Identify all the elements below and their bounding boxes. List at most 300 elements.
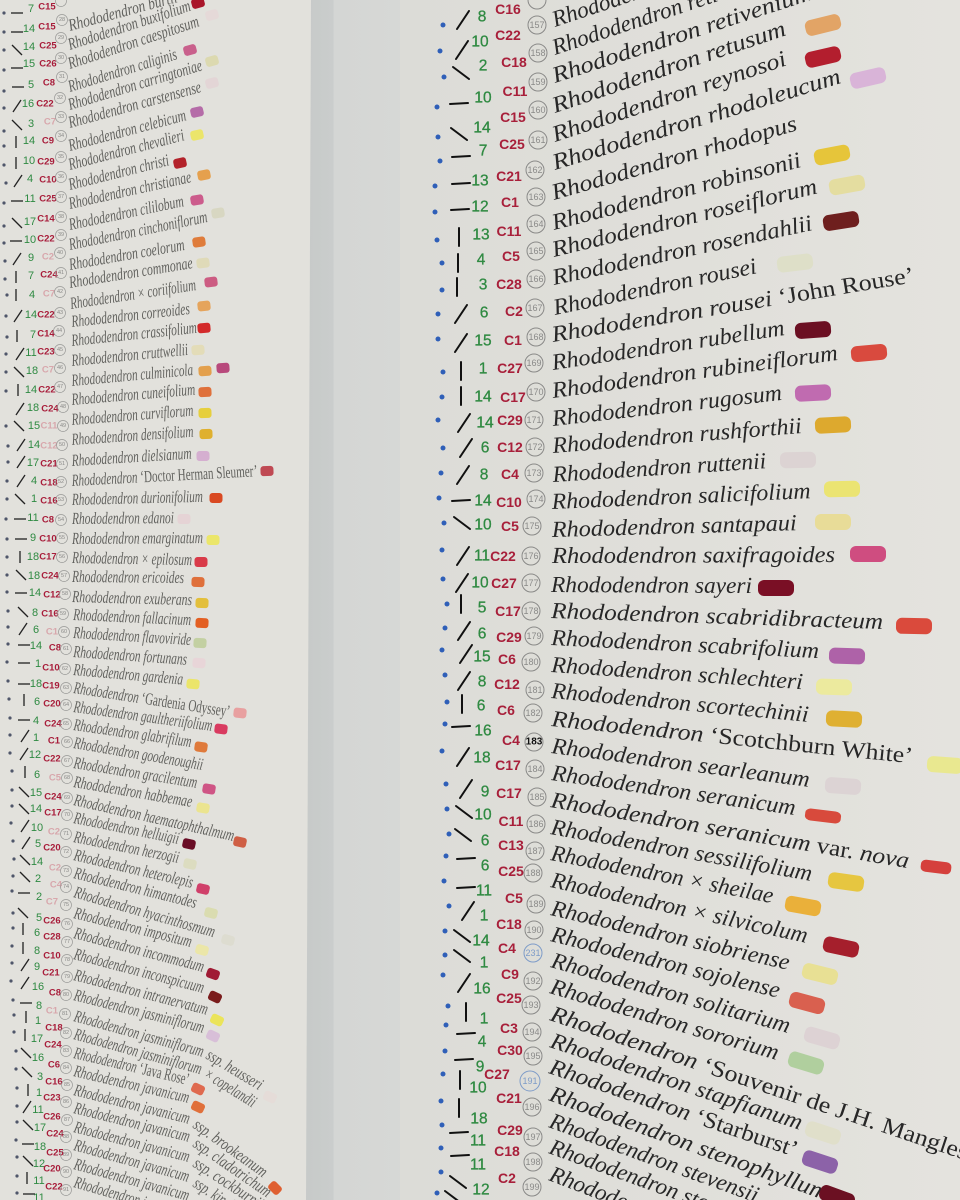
handwritten index columns, left sheet: C22 xyxy=(37,234,55,244)
handwritten index columns, left sheet: 89 xyxy=(63,1152,69,1158)
handwritten index columns, left sheet: 49 xyxy=(60,423,66,429)
row 168: Rhododendron rousei 'John Rouse': 168 xyxy=(528,332,544,342)
handwritten index columns, left sheet: 9 xyxy=(34,961,40,973)
name and swatch: commonae: Rhododendron commonae xyxy=(67,253,194,292)
row 187: Rhododendron × sheilae: C13 xyxy=(498,837,524,853)
row 200: 12 xyxy=(472,1182,490,1198)
handwritten index columns, left sheet: C24 xyxy=(41,570,59,582)
name and swatch: himantodes: Rhododendron himantodes xyxy=(71,863,199,912)
handwritten index columns, left sheet: 17 xyxy=(34,1122,46,1134)
name and swatch: dielsianum xyxy=(70,444,210,470)
handwritten index columns, left sheet: 28 xyxy=(59,17,65,23)
name: jasminiflorum × copelandii: × copelandii xyxy=(201,1064,260,1111)
handwritten index columns, left sheet: 38 xyxy=(58,214,64,220)
row 182: Rhododendron 'Scotchburn White': C6 xyxy=(497,702,515,718)
name and swatch: herzogii: Rhododendron herzogii xyxy=(72,827,181,867)
row 189: Rhododendron siobriense: 189 xyxy=(528,899,544,909)
row 156 xyxy=(440,0,546,29)
handwritten index columns, left sheet: 12 xyxy=(29,749,41,761)
row 169: Rhododendron rubellum: 169 xyxy=(526,358,542,368)
name and swatch: impositum xyxy=(71,903,210,957)
row 160: Rhododendron retusum: Rhododendron retusum xyxy=(548,16,789,118)
row 195: Rhododendron 'Starburst': 4 xyxy=(478,1034,487,1050)
row 180: Rhododendron schlechteri: C6 xyxy=(498,651,516,667)
name and swatch: correoides xyxy=(70,299,211,331)
name and swatch: correoides: Rhododendron correoides xyxy=(70,299,191,331)
row 166: Rhododendron rosendahlii: 3 xyxy=(479,276,487,294)
row 161: Rhododendron reynosoi: Rhododendron reynosoi xyxy=(548,46,789,147)
name and swatch: gardenia xyxy=(72,660,200,690)
row 166: Rhododendron rosendahlii: Rhododendron rosendahlii xyxy=(549,210,814,290)
name and swatch: helluigii: Rhododendron helluigii xyxy=(72,808,181,848)
row 185: Rhododendron seranicum var. nova: C17 xyxy=(496,785,522,801)
row 174: Rhododendron salicifolium xyxy=(436,478,860,514)
handwritten index columns, left sheet: 14 xyxy=(30,640,42,652)
name: javanicum ssp. cladotrichum: Rhododendron javanicum xyxy=(71,1098,192,1146)
name and swatch: cruttwellii: Rhododendron cruttwellii xyxy=(70,340,189,370)
row 179: Rhododendron scabrifolium: 6 xyxy=(478,626,486,642)
name and swatch: dielsianum: Rhododendron dielsianum xyxy=(70,444,192,470)
handwritten index columns, left sheet: C22 xyxy=(45,1182,63,1192)
handwritten index columns, left sheet: C26 xyxy=(43,916,61,926)
row 163: Rhododendron rhodopus xyxy=(432,111,800,216)
row 177: Rhododendron sayeri: 177 xyxy=(523,578,539,588)
handwritten index columns, left sheet: C29 xyxy=(37,156,55,168)
handwritten index columns, left sheet: 15 xyxy=(28,420,40,432)
handwritten index columns, left sheet: 8 xyxy=(36,1000,42,1012)
handwritten index columns, left sheet: 2 xyxy=(36,891,42,903)
handwritten index columns, left sheet: 83 xyxy=(63,1048,69,1054)
row 167: Rhododendron rousei: C2 xyxy=(505,303,523,319)
name and swatch: crassifolium: Rhododendron crassifolium xyxy=(70,318,198,350)
row 165: Rhododendron roseiflorum: 4 xyxy=(477,252,486,268)
row 172: Rhododendron rushforthii: Rhododendron rushforthii xyxy=(550,413,803,458)
name and swatch: intranervatum: Rhododendron intranervatum xyxy=(71,965,210,1019)
name and swatch: helluigii xyxy=(72,808,196,850)
row 174: Rhododendron salicifolium: 174 xyxy=(528,494,544,504)
row 193: Rhododendron 'Souvenir de J.H. Mangles': 193 xyxy=(523,1000,539,1010)
row 184: Rhododendron seranicum: C17 xyxy=(495,757,521,773)
row 195: Rhododendron 'Starburst' xyxy=(444,1022,840,1175)
handwritten index columns, left sheet: C12 xyxy=(43,590,61,600)
handwritten index columns, left sheet: 75 xyxy=(63,902,69,908)
row 164: Rhododendron robinsonii: Rhododendron robinsonii xyxy=(548,147,803,235)
handwritten index columns, left sheet: 16 xyxy=(22,98,34,110)
handwritten index columns, left sheet: C20 xyxy=(43,842,61,854)
name and swatch: intranervatum xyxy=(71,965,225,1027)
row 178: Rhododendron scabridibracteum: 5 xyxy=(478,600,486,616)
row 180: Rhododendron schlechteri xyxy=(440,645,852,696)
name and swatch: cuneifolium xyxy=(70,380,212,409)
row 181: Rhododendron scortechinii: Rhododendron scortechinii xyxy=(550,678,810,727)
row 195: Rhododendron 'Starburst': C30 xyxy=(497,1042,523,1058)
handwritten index columns, left sheet: 1 xyxy=(36,1087,42,1099)
row 184: Rhododendron seranicum: Rhododendron seranicum xyxy=(549,760,797,820)
row 164: Rhododendron robinsonii xyxy=(434,144,851,246)
name and swatch: habbemae: Rhododendron habbemae xyxy=(72,772,194,811)
name and swatch: crassifolium xyxy=(70,318,211,350)
row 175: Rhododendron santapaui xyxy=(442,510,851,542)
name: goodenoughii: Rhododendron goodenoughii xyxy=(72,733,205,774)
row 179: Rhododendron scabrifolium: C29 xyxy=(496,629,522,645)
handwritten index columns, left sheet: C21 xyxy=(42,968,60,978)
row 193: Rhododendron 'Souvenir de J.H. Mangles': 16 xyxy=(473,980,491,998)
row 176: Rhododendron saxifragoides: 176 xyxy=(523,551,539,561)
row 190: Rhododendron sojolense xyxy=(446,902,826,1015)
row 187: Rhododendron × sheilae: Rhododendron × sheilae xyxy=(548,840,776,908)
handwritten index columns, left sheet: C24 xyxy=(46,1128,64,1140)
row 160: Rhododendron retusum xyxy=(436,13,842,140)
row 195: Rhododendron 'Starburst': Rhododendron ‘Starburst’ xyxy=(545,1054,802,1162)
row 169: Rhododendron rubellum: 1 xyxy=(479,360,487,378)
row 189: Rhododendron siobriense xyxy=(442,878,839,986)
row 182: Rhododendron 'Scotchburn White': 182 xyxy=(525,708,541,718)
handwritten index columns, left sheet: C7 xyxy=(42,364,54,376)
row 172: Rhododendron rushforthii: 6 xyxy=(481,440,489,456)
handwritten index columns, left sheet: 43 xyxy=(57,310,63,316)
handwritten index columns, left sheet: 69 xyxy=(64,795,70,801)
handwritten index columns, left sheet: 73 xyxy=(63,868,69,874)
handwritten index columns, left sheet: 41 xyxy=(58,270,64,276)
row 171: Rhododendron rugosum: 171 xyxy=(526,415,542,425)
name and swatch: durionifolium: Rhododendron durionifolium xyxy=(71,487,203,509)
row 165: Rhododendron roseiflorum: 165 xyxy=(528,246,544,256)
row 231: Rhododendron solitarium: Rhododendron solitarium xyxy=(548,947,793,1038)
name and swatch: emarginatum: Rhododendron emarginatum xyxy=(71,528,203,548)
row 175: Rhododendron santapaui: 175 xyxy=(524,521,540,531)
name and swatch: cililobum xyxy=(66,191,204,234)
handwritten index columns, left sheet: 6 xyxy=(34,927,40,939)
handwritten index columns, left sheet: C23 xyxy=(43,1092,61,1104)
row 187: Rhododendron × sheilae: 187 xyxy=(527,846,543,856)
row 160: Rhododendron retusum: C15 xyxy=(500,109,526,125)
row 163: Rhododendron rhodopus: 12 xyxy=(471,198,489,216)
row 158: Rhododendron reticulatum: 158 xyxy=(530,48,546,58)
name and swatch: fortunans xyxy=(72,642,206,669)
handwritten index columns, left sheet: 50 xyxy=(59,442,65,448)
row 198: Rhododendron suaveolens: C18 xyxy=(494,1143,520,1159)
handwritten index columns, left sheet: C8 xyxy=(49,988,61,998)
name and swatch: coelorum: Rhododendron coelorum xyxy=(67,235,186,274)
row 191: Rhododendron stenophyllum: Rhododendron stenophyllum xyxy=(545,1081,832,1200)
row 163: Rhododendron rhodopus: 163 xyxy=(528,192,544,202)
name and swatch: gracilentum xyxy=(72,753,216,795)
name and swatch: densifolium xyxy=(70,422,213,449)
handwritten index columns, left sheet: 14 xyxy=(31,856,43,868)
handwritten index columns, left sheet: 36 xyxy=(58,174,64,180)
name and swatch: fallacinum: Rhododendron fallacinum xyxy=(72,605,192,629)
row 179: Rhododendron scabrifolium: Rhododendron scabrifolium xyxy=(550,625,820,663)
handwritten index columns, left sheet: 16 xyxy=(32,1052,44,1064)
handwritten index columns, left sheet: C26 xyxy=(43,1112,61,1122)
name and swatch: coriifolium: Rhododendron × coriifolium xyxy=(68,275,197,313)
handwritten index columns, left sheet: C14 xyxy=(37,328,55,340)
handwritten index columns, left sheet: 34 xyxy=(58,133,64,139)
handwritten index columns, left sheet: 65 xyxy=(63,721,69,727)
name and swatch: javanicum ssp. brookeanum xyxy=(71,1080,283,1196)
handwritten index columns, left sheet: 61 xyxy=(63,646,69,652)
handwritten index columns, left sheet: 40 xyxy=(57,250,63,256)
handwritten index columns, left sheet: C7 xyxy=(43,288,55,300)
row 196: Rhododendron stevensii xyxy=(440,1071,762,1200)
handwritten index columns, left sheet: C8 xyxy=(43,78,55,88)
name: jasminiflorum × copelandii: Rhododendron jasminiflorum xyxy=(71,1024,204,1078)
handwritten index columns, left sheet: C24 xyxy=(44,792,62,802)
row 183: Rhododendron searleanum: C4 xyxy=(502,732,520,748)
row 193: Rhododendron 'Souvenir de J.H. Mangles': C25 xyxy=(496,990,522,1006)
name and swatch: carstensense: Rhododendron carstensense xyxy=(65,77,204,132)
handwritten index columns, left sheet: 17 xyxy=(27,457,39,469)
name and swatch: caliginis: Rhododendron caliginis xyxy=(65,45,179,96)
handwritten index columns, left sheet: C20 xyxy=(43,698,61,710)
handwritten index columns, left sheet: C22 xyxy=(37,310,55,320)
row 178: Rhododendron scabridibracteum xyxy=(444,595,932,634)
row 185: Rhododendron seranicum var. nova: Rhododendron seranicum var. nova xyxy=(548,787,911,873)
handwritten index columns, left sheet: C9 xyxy=(42,136,54,146)
handwritten index columns, left sheet: C16 xyxy=(40,496,58,506)
handwritten index columns, left sheet: 63 xyxy=(63,685,69,691)
row 186: Rhododendron sessilifolium: 186 xyxy=(528,819,544,829)
handwritten index columns, left sheet: C10 xyxy=(42,662,60,674)
handwritten index columns, left sheet: C17 xyxy=(39,552,57,562)
handwritten index columns, left sheet: 17 xyxy=(24,216,36,228)
handwritten index columns, left sheet: 15 xyxy=(30,787,42,799)
row 184: Rhododendron seranicum: 184 xyxy=(527,764,543,774)
handwritten index columns, left sheet: 56 xyxy=(59,554,65,560)
handwritten index columns, left sheet: 84 xyxy=(63,1065,69,1071)
handwritten index columns, left sheet: C4 xyxy=(50,880,63,890)
handwritten index columns, left sheet: C10 xyxy=(43,950,61,962)
species names and colour swatches, left sheet xyxy=(65,0,283,1200)
row 158: Rhododendron reticulatum: C18 xyxy=(501,54,527,70)
handwritten index columns, left sheet: C16 xyxy=(45,1076,63,1088)
name and swatch: gracilentum: Rhododendron gracilentum xyxy=(72,753,199,792)
name and swatch: javanicum: Rhododendron javanicum xyxy=(71,1061,191,1107)
handwritten index columns, left sheet: C24 xyxy=(44,718,62,730)
row 172: Rhododendron rushforthii xyxy=(440,413,851,458)
row 163: Rhododendron rhodopus: C1 xyxy=(501,194,519,210)
row 165: Rhododendron roseiflorum: Rhododendron roseiflorum xyxy=(548,174,820,262)
handwritten index columns, left sheet: 9 xyxy=(28,252,34,264)
name and swatch: heterolepis: Rhododendron heterolepis xyxy=(71,845,195,892)
row 164: Rhododendron robinsonii: C11 xyxy=(497,223,522,239)
handwritten index columns, left sheet: 14 xyxy=(29,587,41,599)
handwritten index columns, left sheet: C28 xyxy=(43,932,61,942)
handwritten index columns, left sheet: C25 xyxy=(39,40,57,52)
row 197: Rhododendron stonori xyxy=(438,1098,749,1200)
name and swatch: gardenia: Rhododendron gardenia xyxy=(72,660,184,689)
handwritten index columns, left sheet: 55 xyxy=(59,535,65,541)
handwritten index columns, left sheet: C25 xyxy=(39,194,57,204)
name and swatch: impositum: Rhododendron impositum xyxy=(71,903,194,951)
handwritten index columns, left sheet: 82 xyxy=(63,1030,69,1036)
row 183: Rhododendron searleanum xyxy=(442,722,862,795)
row 181: Rhododendron scortechinii: 8 xyxy=(478,674,486,690)
row 184: Rhododendron seranicum xyxy=(440,748,842,824)
handwritten index columns, left sheet: 70 xyxy=(64,812,70,818)
panel: right poster sheet xyxy=(400,0,960,1200)
handwritten index columns, left sheet: 87 xyxy=(64,1117,70,1123)
handwritten index columns, left sheet: 8 xyxy=(34,945,40,957)
row 180: Rhododendron schlechteri: 180 xyxy=(523,657,539,667)
name and swatch: haematophthalmum xyxy=(71,790,247,848)
row 178: Rhododendron scabridibracteum: C17 xyxy=(495,603,521,619)
name and swatch: jasminiflorum ssp. heusseri: ssp. heusseri xyxy=(203,1045,267,1094)
row 197: Rhododendron stonori: 197 xyxy=(525,1132,541,1142)
handwritten index columns, left sheet: 37 xyxy=(58,194,64,200)
name and swatch: chevalieri: Rhododendron chevalieri xyxy=(66,125,186,174)
name and swatch: glabrifilum xyxy=(72,715,208,753)
row 176: Rhododendron saxifragoides xyxy=(440,542,886,568)
row 189: Rhododendron siobriense: 11 xyxy=(476,882,492,900)
handwritten index columns, left sheet: 18 xyxy=(28,570,40,582)
row 170: Rhododendron rubineiflorum: C17 xyxy=(500,389,526,405)
name and swatch: epilosum: Rhododendron × epilosum xyxy=(71,548,192,569)
row 164: Rhododendron robinsonii: 164 xyxy=(528,219,544,229)
name and swatch: cililobum: Rhododendron cililobum xyxy=(66,191,185,234)
row 168: Rhododendron rousei 'John Rouse' xyxy=(436,262,916,352)
row 231: Rhododendron solitarium: 14 xyxy=(472,932,490,950)
row 186: Rhododendron sessilifolium: Rhododendron sessilifolium xyxy=(548,814,814,886)
name and swatch: habbemae xyxy=(72,772,210,814)
handwritten index columns, left sheet: C12 xyxy=(40,440,58,452)
handwritten index columns, left sheet: 8 xyxy=(32,607,38,619)
handwritten index columns, left sheet: 29 xyxy=(58,35,64,41)
handwritten index columns, left sheet: C19 xyxy=(42,680,60,692)
handwritten index columns, left sheet: 18 xyxy=(30,678,42,690)
row 175: Rhododendron santapaui: C5 xyxy=(501,518,519,534)
row 166: Rhododendron rosendahlii: 166 xyxy=(528,274,544,284)
row 170: Rhododendron rubineiflorum: Rhododendron rubineiflorum xyxy=(549,340,839,403)
handwritten index columns, left sheet: 39 xyxy=(58,232,64,238)
handwritten index columns, left sheet: 18 xyxy=(34,1141,46,1153)
row 192: Rhododendron sororium xyxy=(442,950,826,1076)
handwritten index columns, left sheet: 80 xyxy=(63,992,69,998)
handwritten index columns, left sheet: 57 xyxy=(61,573,67,579)
handwritten index columns, left sheet: C7 xyxy=(46,896,58,908)
row 177: Rhododendron sayeri xyxy=(440,572,794,598)
handwritten index columns, left sheet: 3 xyxy=(37,1071,43,1083)
handwritten index columns, left sheet: C8 xyxy=(42,514,54,526)
handwritten index columns, left sheet: 79 xyxy=(64,974,70,980)
handwritten index columns, left sheet: C2 xyxy=(42,252,54,262)
handwritten index columns, left sheet: C24 xyxy=(41,404,59,414)
row 171: Rhododendron rugosum: 14 xyxy=(476,414,494,432)
handwritten index columns, left sheet: 91 xyxy=(63,1187,69,1193)
name and swatch: jasminiflorum ssp. heusseri: Rhododendron jasminiflorum xyxy=(71,1006,206,1061)
name and swatch: inconspicuum: Rhododendron inconspicuum xyxy=(71,944,206,997)
handwritten index columns, left sheet: 71 xyxy=(63,831,69,837)
row 175: Rhododendron santapaui: 10 xyxy=(474,516,492,534)
handwritten index columns, left sheet: 47 xyxy=(57,384,63,390)
name and swatch: commonae xyxy=(67,253,210,292)
name: javanicum ssp. cockburnii xyxy=(71,1117,267,1200)
handwritten index columns, left sheet: 74 xyxy=(63,884,69,890)
name and swatch: glabrifilum: Rhododendron glabrifilum xyxy=(72,715,193,751)
row 198: Rhododendron suaveolens xyxy=(440,1122,782,1200)
name and swatch: Gardenia Odyssey: Rhododendron ‘Gardenia Odyssey’ xyxy=(72,678,231,721)
handwritten index columns, left sheet: 1 xyxy=(33,732,39,744)
handwritten index columns, left sheet: 1 xyxy=(35,658,41,670)
row 186: Rhododendron sessilifolium: 10 xyxy=(474,806,492,824)
row 171: Rhododendron rugosum: C29 xyxy=(497,412,523,428)
row 177: Rhododendron sayeri: Rhododendron sayeri xyxy=(550,572,752,598)
handwritten index columns, left sheet: C8 xyxy=(49,642,61,654)
name and swatch: cuneifolium: Rhododendron cuneifolium xyxy=(70,380,196,409)
handwritten index columns, left sheet: 18 xyxy=(27,551,39,563)
name and swatches: culminicola: Rhododendron culminicola xyxy=(70,360,194,390)
row 173: Rhododendron ruttenii: 173 xyxy=(526,468,542,478)
row 196: Rhododendron stevensii: 10 xyxy=(469,1080,487,1096)
handwritten index columns, left sheet: 2 xyxy=(35,873,41,885)
row 176: Rhododendron saxifragoides: C22 xyxy=(490,548,516,564)
handwritten index columns, left sheet xyxy=(2,0,72,1200)
handwritten index columns, left sheet: C20 xyxy=(43,1164,61,1174)
row 167: Rhododendron rousei: 6 xyxy=(480,304,488,322)
row 170: Rhododendron rubineiflorum: 170 xyxy=(528,387,544,397)
handwritten index columns, left sheet: 10 xyxy=(23,155,35,167)
handwritten index columns, left sheet: 14 xyxy=(23,23,35,35)
handwritten index columns, left sheet: C10 xyxy=(39,534,57,544)
panel: left poster sheet xyxy=(0,0,311,1200)
row 184: Rhododendron seranicum: 18 xyxy=(473,750,491,766)
row 182: Rhododendron 'Scotchburn White': Rhododendron ‘Scotchburn White’ xyxy=(549,706,914,768)
row 178: Rhododendron scabridibracteum: 178 xyxy=(523,606,539,616)
name: javanicum ssp. kinabaluense: Rhododendron javanicum xyxy=(71,1135,192,1186)
handwritten index columns, left sheet: 14 xyxy=(25,309,37,321)
handwritten index columns, left sheet: 5 xyxy=(35,838,41,850)
row 176: Rhododendron saxifragoides: Rhododendron saxifragoides xyxy=(551,542,835,568)
name and swatch: Doctor Herman Sleumer: Rhododendron ‘Doctor Herman Sleumer’ xyxy=(71,461,258,490)
row 199: 199 xyxy=(524,1182,540,1192)
handwritten index columns, left sheet: 14 xyxy=(30,803,42,815)
row 183: Rhododendron searleanum: 16 xyxy=(474,722,492,740)
name and swatch: densifolium: Rhododendron densifolium xyxy=(70,422,194,449)
handwritten index columns, left sheet: 33 xyxy=(58,114,64,120)
name and swatch: christi xyxy=(66,150,187,194)
handwritten index columns, left sheet: C1 xyxy=(46,1006,59,1016)
row 231: Rhododendron solitarium: 231 xyxy=(525,948,541,958)
row 178: Rhododendron scabridibracteum: Rhododendron scabridibracteum xyxy=(550,598,883,634)
handwritten index columns, left sheet: 4 xyxy=(33,715,39,727)
row 157: Rhododendron resinosum: 157 xyxy=(529,20,545,30)
handwritten index columns, left sheet: 46 xyxy=(57,365,63,371)
name and swatch: cinchoniflorum xyxy=(66,207,225,254)
row 177: Rhododendron sayeri: 10 xyxy=(471,574,489,592)
row 169: Rhododendron rubellum: C27 xyxy=(497,360,523,376)
row 190: Rhododendron sojolense: 190 xyxy=(526,925,542,935)
name and swatch: ericoides: Rhododendron ericoides xyxy=(71,567,184,587)
row 159: Rhododendron retivenium: C11 xyxy=(503,83,528,99)
handwritten index columns, left sheet: 81 xyxy=(62,1011,68,1017)
handwritten index columns, left sheet: C5 xyxy=(49,772,62,784)
row 199: C2 xyxy=(498,1170,516,1186)
handwritten index columns, left sheet: C10 xyxy=(39,174,57,186)
handwritten index columns, left sheet: C6 xyxy=(48,1060,60,1070)
name: javanicum ssp. cockburnii: Rhododendron javanicum xyxy=(71,1117,192,1166)
handwritten index columns, left sheet: C22 xyxy=(38,384,56,396)
row 185: Rhododendron seranicum var. nova xyxy=(444,780,952,875)
row 174: Rhododendron salicifolium: 14 xyxy=(474,492,492,510)
row 159: Rhododendron retivenium: 10 xyxy=(474,90,492,106)
handwritten index columns, left sheet: 14 xyxy=(25,384,37,396)
handwritten index columns, left sheet: C16 xyxy=(41,608,59,620)
row 200 xyxy=(438,1170,490,1198)
handwritten index columns, left sheet: 77 xyxy=(64,939,70,945)
row 186: Rhododendron sessilifolium: C11 xyxy=(499,813,524,829)
handwritten index columns, left sheet: 11 xyxy=(32,1104,44,1116)
row 199: 11 xyxy=(470,1156,486,1174)
